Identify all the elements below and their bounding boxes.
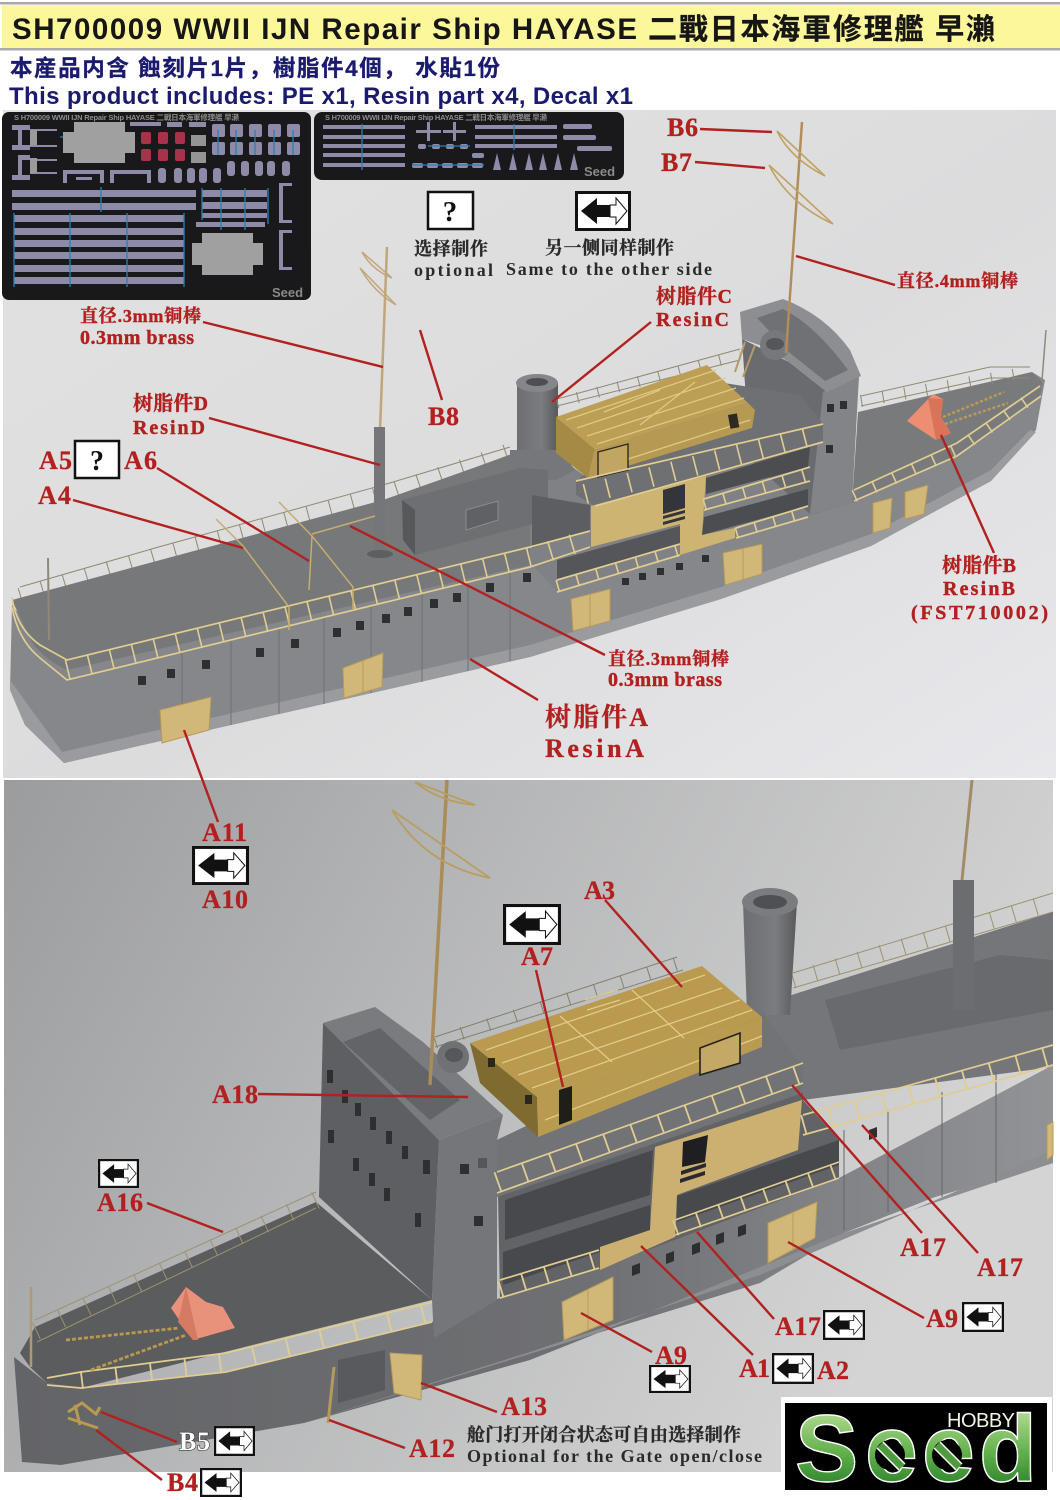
- hull windows: [138, 401, 847, 685]
- far forward rail: [35, 1192, 316, 1342]
- product contents text: 本産品内含 蝕刻片1片，樹脂件4個， 水貼1份: [10, 56, 500, 81]
- callout A7: [505, 906, 563, 1087]
- forward mast: [769, 122, 833, 353]
- callout resin C: 树脂件C: [656, 285, 732, 308]
- legend: same to the other side: [506, 192, 712, 279]
- callout resin B: [911, 435, 1048, 624]
- PE sheet A: [2, 112, 311, 300]
- callout A5 A6 optional: A6: [124, 446, 157, 475]
- midship superstructure: [530, 395, 852, 592]
- callout B5: [101, 1412, 254, 1456]
- callout A3: A3: [584, 876, 615, 905]
- near rails: [12, 386, 1041, 680]
- callout B4: [96, 1430, 241, 1497]
- callout resin C: [552, 285, 732, 402]
- gold cabin: [556, 365, 755, 478]
- callout 0.3mm brass mast: [80, 306, 383, 367]
- PE sheet A: Seed: [272, 285, 303, 300]
- callout 0.3mm brass aft: [350, 526, 729, 691]
- superstructure: [497, 1013, 839, 1298]
- gate note: Optional for the Gate open/close: [467, 1446, 762, 1466]
- bow jack staff: [1042, 330, 1046, 380]
- PE sheet B: Seed: [584, 164, 615, 179]
- callout B4: B4: [167, 1468, 198, 1497]
- title band: 二戰日本海軍修理艦 早瀨: [648, 13, 995, 46]
- callout B5: B5: [179, 1427, 210, 1456]
- title band: SH700009 WWII IJN Repair Ship HAYASE: [12, 13, 637, 46]
- callout resin D: 树脂件D: [133, 392, 208, 415]
- hull: [10, 372, 1045, 763]
- forward deck: [20, 1202, 432, 1388]
- callout A12: A12: [409, 1434, 455, 1463]
- PE sheet B: S H700009 WWII IJN Repair Ship HAYASE 二戰日本海軍修理艦 早瀨: [325, 112, 548, 122]
- gate opening: [338, 1350, 385, 1403]
- gold panel: [591, 476, 735, 555]
- callouts top: [38, 113, 1048, 914]
- callout resin A: 树脂件A: [545, 703, 648, 732]
- far aft rail: [20, 447, 510, 605]
- callout resin B: ResinB: [943, 578, 1015, 600]
- tower ladder: [735, 342, 755, 377]
- callout resin C: ResinC: [656, 309, 729, 331]
- legend: optional: optional: [414, 260, 493, 280]
- upper deck: [497, 1013, 803, 1197]
- callout B7: B7: [661, 148, 692, 177]
- callout A1 A2: [641, 1246, 849, 1385]
- callout A5 A6 optional: A5: [39, 446, 72, 475]
- callout A13: A13: [501, 1392, 547, 1421]
- far aft deck: [760, 912, 1053, 1100]
- callout 0.3mm brass aft: 0.3mm brass: [608, 669, 722, 691]
- anchor chains: [66, 1328, 186, 1370]
- callout A13: [421, 1383, 547, 1421]
- PE sheet A: S H700009 WWII IJN Repair Ship HAYASE 二戰日本海軍修理艦 早瀨: [14, 112, 240, 122]
- callout 0.3mm brass aft: 直径.3mm铜棒: [608, 649, 729, 669]
- gate note: [467, 1424, 762, 1466]
- gold gates: [328, 1122, 1053, 1423]
- callout B6: [667, 113, 772, 142]
- tower windows: [327, 1070, 487, 1227]
- callout A17 right: [862, 1125, 1023, 1282]
- near rails: [47, 1045, 1053, 1388]
- bottom ship model: [14, 780, 1053, 1465]
- gold frames on deck: [216, 502, 375, 630]
- callout A9 left: [581, 1313, 690, 1392]
- callout A16: A16: [97, 1188, 143, 1217]
- callouts bottom: [96, 876, 1023, 1497]
- photo panel: top ship background: [3, 110, 1056, 778]
- stern staff: [48, 558, 49, 640]
- far rail upper: [435, 957, 683, 1047]
- top ship model: [10, 122, 1046, 763]
- callout A9 right: [788, 1242, 1003, 1333]
- forward mast: [392, 780, 490, 1085]
- far midship rail: [557, 349, 740, 406]
- anchor chains: [943, 392, 1008, 424]
- hull bottom rim: [304, 1150, 1053, 1423]
- funnel: [510, 374, 575, 480]
- hull rim: [10, 430, 1036, 763]
- anchor winch resin B: [907, 394, 951, 440]
- far aft rail: [793, 893, 1053, 988]
- callout A3: [584, 876, 682, 987]
- openings: [503, 1140, 839, 1285]
- legend: same to the other side: Same to the other side: [506, 259, 712, 279]
- hull windows: [632, 1127, 877, 1276]
- logo e slash left: [875, 1440, 905, 1470]
- logo: Seed Hobby: HOBBY: [947, 1410, 1015, 1432]
- funnel: [742, 888, 798, 1015]
- gate note: 舱门打开闭合状态可自由选择制作: [467, 1424, 741, 1445]
- gold panel: [600, 1100, 802, 1270]
- callout A5 A6 optional: ?: [90, 446, 104, 477]
- dark openings: [532, 447, 810, 580]
- callout A1 A2: A2: [817, 1356, 849, 1385]
- callout 0.4mm brass: 直径.4mm铜棒: [897, 271, 1018, 291]
- product contents text: This product includes: PE x1, Resin part x4, Decal x1: [9, 83, 633, 110]
- aft deckhouse: [402, 468, 548, 555]
- hull panel seams: [182, 572, 510, 737]
- callout A11 A10: [184, 730, 248, 914]
- hawse pipe anchor: [68, 1403, 100, 1428]
- callout 0.3mm brass mast: 直径.3mm铜棒: [80, 306, 201, 326]
- callout A4: A4: [38, 481, 71, 510]
- callout A1 A2: A1: [739, 1354, 770, 1383]
- aft deckhouse: [825, 955, 1053, 1050]
- far forward rail: [861, 367, 1030, 406]
- logo e slash right: [932, 1440, 962, 1470]
- callout A18: A18: [212, 1080, 258, 1109]
- callout A17 lower: A17: [775, 1312, 821, 1341]
- callout A17 middle: [792, 1085, 946, 1262]
- gold cabin: [470, 966, 762, 1137]
- callout B7: [661, 148, 765, 177]
- callout B8: [420, 330, 459, 431]
- callout A16: [97, 1160, 223, 1232]
- callout A18: [212, 1080, 468, 1109]
- callout A9 right: A9: [926, 1304, 958, 1333]
- legend: optional: 选择制作: [414, 238, 488, 259]
- callout resin D: [133, 392, 380, 465]
- forward deck: [852, 372, 1042, 503]
- callout B6: B6: [667, 113, 698, 142]
- aft mast: [360, 247, 396, 558]
- callout A5 A6 optional: [39, 441, 309, 561]
- callout A9 left: A9: [655, 1341, 687, 1370]
- aft mast: [953, 780, 974, 1010]
- callout resin B: (FST710002): [911, 602, 1048, 624]
- callout 0.4mm brass: [796, 256, 1018, 291]
- title band: [0, 2, 1060, 50]
- callout resin D: ResinD: [133, 417, 205, 439]
- callout resin B: 树脂件B: [942, 554, 1016, 577]
- tower: [319, 1007, 503, 1338]
- callout B8: B8: [428, 402, 459, 431]
- callout A17 middle: A17: [900, 1233, 946, 1262]
- callout 0.3mm brass mast: 0.3mm brass: [80, 327, 194, 349]
- callout resin A: ResinA: [545, 734, 644, 763]
- callout A17 right: A17: [977, 1253, 1023, 1282]
- callout A4: [38, 481, 243, 548]
- upper deck: [576, 380, 823, 506]
- callout A11 A10: A11: [202, 818, 247, 847]
- callout resin A: [470, 659, 648, 763]
- gold doors: [160, 485, 928, 743]
- callout A17 lower: [697, 1232, 864, 1341]
- tower: [740, 299, 861, 514]
- callout A11 A10: A10: [202, 885, 248, 914]
- legend: optional: ?: [443, 196, 457, 228]
- logo: Seed Hobby: Seed: [795, 1396, 1037, 1500]
- product contents text: [9, 56, 633, 110]
- callout A12: [329, 1420, 455, 1463]
- legend: optional: [414, 192, 493, 280]
- PE sheet B: [314, 112, 624, 180]
- callout A7: A7: [521, 942, 553, 971]
- bow staff: [30, 1287, 32, 1367]
- legend: same to the other side: 另一侧同样制作: [545, 237, 674, 258]
- hull: [14, 1065, 1053, 1465]
- aft deck: [12, 450, 590, 670]
- photo panel: bottom ship background: [4, 780, 1053, 1472]
- anchor winch resin B: [171, 1287, 235, 1340]
- hull panel seams: [844, 1072, 996, 1230]
